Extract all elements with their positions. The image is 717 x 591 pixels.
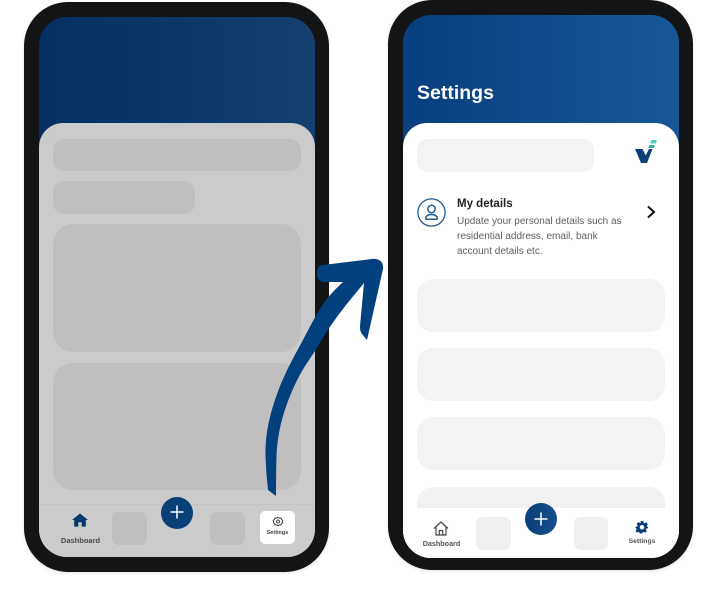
placeholder: row three	[417, 417, 665, 470]
placeholder: short bar	[53, 181, 195, 214]
placeholder: nav slot one	[112, 512, 147, 545]
panel: dimmed content	[39, 123, 315, 557]
button: add	[525, 503, 557, 535]
phone: dimmed dashboard	[24, 2, 329, 572]
icon: gear outline	[272, 516, 284, 526]
tile: Settings highlighted	[260, 511, 295, 544]
heading: Settings: Settings	[417, 82, 494, 104]
placeholder: wide bar	[53, 139, 301, 171]
placeholder: nav slot two	[210, 512, 245, 545]
icon: gear filled	[636, 521, 648, 534]
text: My details description: residential address, email, bank	[457, 231, 598, 242]
placeholder: nav slot two	[574, 517, 608, 550]
placeholder: row four	[417, 487, 665, 540]
placeholder: row one	[417, 279, 665, 332]
text: My details description	[457, 216, 622, 257]
icon: brand logo	[635, 140, 657, 163]
text: My details description: account details etc.	[457, 246, 543, 257]
icon: plus	[534, 512, 548, 526]
placeholder: row two	[417, 348, 665, 401]
icon: chevron right	[647, 206, 656, 218]
placeholder: nav slot one	[476, 517, 511, 550]
panel: navigation bar	[403, 508, 679, 558]
text: My details title: My details	[457, 198, 513, 210]
panel: navigation bar	[39, 504, 315, 557]
icon: person in circle	[417, 198, 446, 227]
placeholder: card one	[53, 224, 301, 352]
label: Settings: Settings	[267, 530, 288, 536]
phone: settings screen	[388, 0, 693, 570]
row: My details	[417, 198, 656, 257]
icon: home outline	[434, 521, 448, 536]
label: Settings: Settings	[629, 538, 655, 545]
panel: settings content	[403, 123, 679, 558]
placeholder: card two	[53, 363, 301, 490]
label: Dashboard: Dashboard	[423, 539, 460, 548]
label: Dashboard: Dashboard	[61, 536, 100, 545]
text: My details description: Update your personal details such as	[457, 216, 622, 227]
screen: dashboard	[39, 17, 315, 557]
placeholder: search bar	[417, 139, 594, 172]
screen: settings	[403, 15, 679, 558]
button: add	[161, 497, 193, 529]
icon: home	[72, 514, 88, 527]
icon: plus	[170, 506, 184, 518]
